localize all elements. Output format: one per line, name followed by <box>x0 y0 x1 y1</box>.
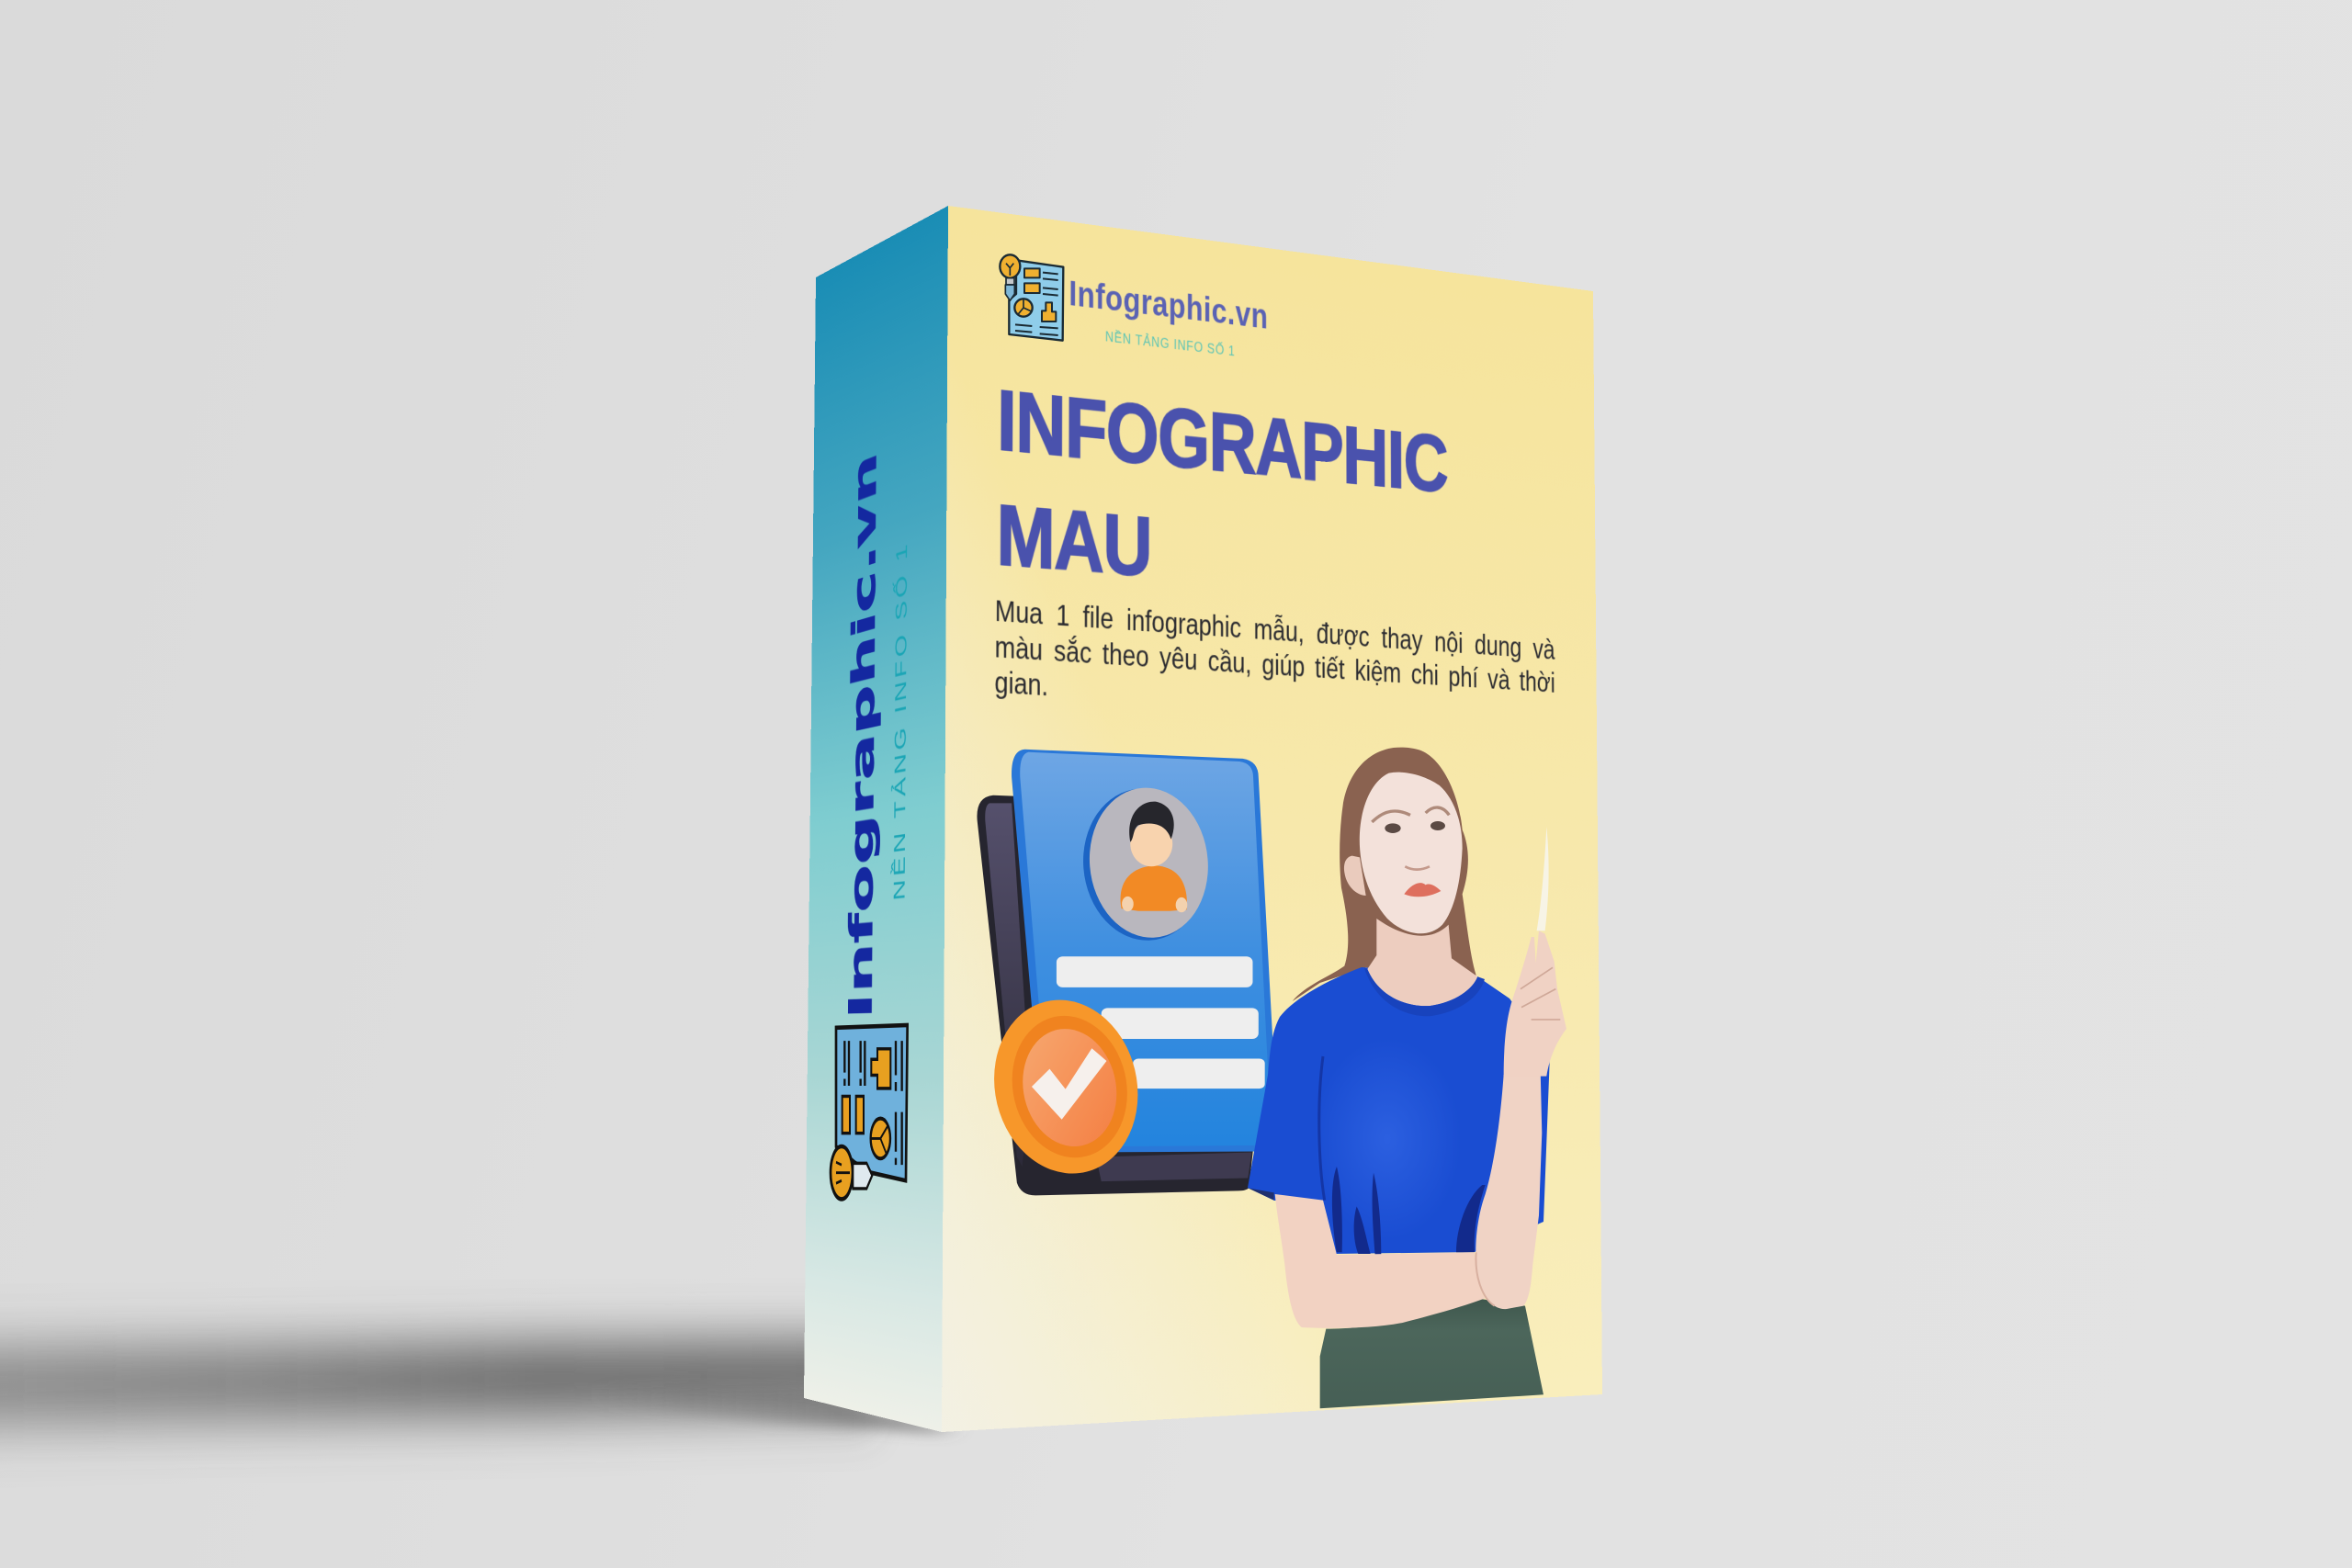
description text: màu sắc theo yêu cầu, giúp tiết kiệm chi phí và thời <box>995 630 1555 699</box>
icon: front logo <box>1000 254 1063 341</box>
description text: Mua 1 file infographic mẫu, được thay nội dung và <box>995 594 1555 666</box>
neck <box>1367 919 1477 1006</box>
title line 1: INFOGRAPHIC <box>997 372 1448 510</box>
side brand name: Infographic.vn <box>842 448 884 1020</box>
avatar badge <box>1078 784 1214 944</box>
ear <box>1344 856 1366 896</box>
description text: gian. <box>994 666 1048 703</box>
check badge <box>982 991 1150 1182</box>
floor shadow <box>0 1343 946 1433</box>
panel: box front face <box>942 206 1602 1432</box>
hand <box>1504 931 1566 1077</box>
illustration: woman holding pen <box>1248 748 1566 1408</box>
face <box>1360 773 1463 933</box>
title line 2: MAU <box>996 487 1151 594</box>
blue t-shirt <box>1248 967 1550 1256</box>
icon: side logo <box>831 1025 908 1199</box>
illustration: profile card with check badge <box>977 750 1278 1195</box>
hair <box>1293 748 1476 1001</box>
white lines <box>1057 956 1265 1089</box>
collar band <box>1364 968 1485 1016</box>
arms <box>1275 1068 1542 1328</box>
skirt <box>1320 1298 1544 1408</box>
panel: box side face <box>804 206 948 1432</box>
dark back plate <box>977 795 1254 1195</box>
pen <box>1537 827 1549 931</box>
logo tagline: NỀN TẢNG INFO SỐ 1 <box>1105 329 1236 359</box>
description text <box>994 594 1555 703</box>
side tagline: NỀN TẢNG INFO SỐ 1 <box>890 539 910 901</box>
logo wordmark: Infographic.vn <box>1069 273 1268 336</box>
blue card <box>1012 750 1278 1152</box>
